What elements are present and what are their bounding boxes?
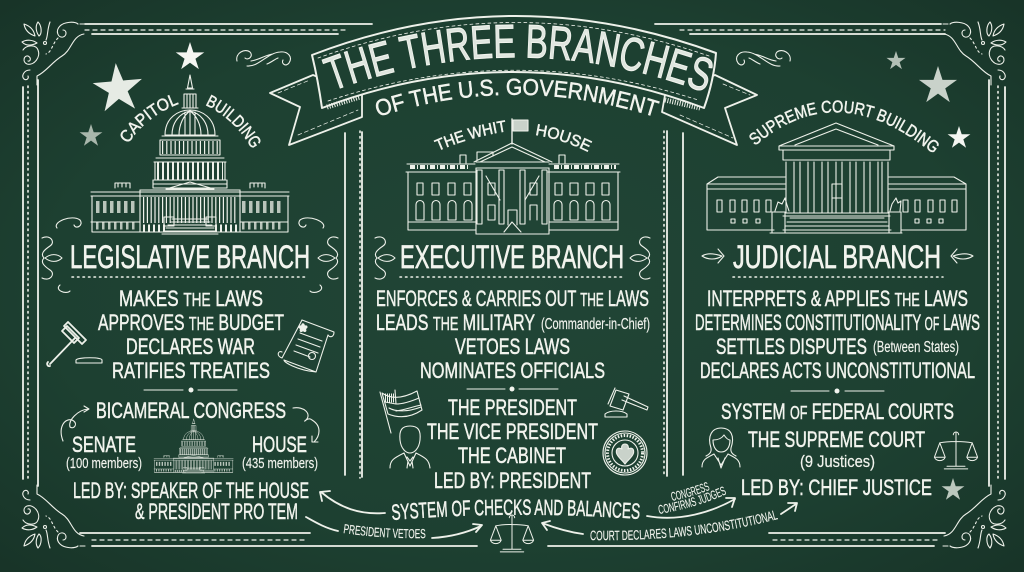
text block: led by: LED BY: SPEAKER OF THE HOUSE <box>73 478 309 503</box>
icon: gavel <box>47 322 102 366</box>
arrow: to legislative <box>320 491 385 513</box>
top swirls <box>237 51 790 66</box>
text block: bicameral congress <box>66 398 318 472</box>
text block: powers: (Commander-in-Chief) <box>541 316 650 333</box>
capitol building label: CAPITOL <box>120 94 179 142</box>
icon: supreme court <box>707 123 966 233</box>
arrow: congress confirms judges: CONGRESS <box>671 482 710 501</box>
icon: presidential seal <box>603 431 647 475</box>
icon: scroll <box>278 320 334 372</box>
text block: powers: (Between States) <box>873 339 959 356</box>
icon: scales of justice <box>934 432 978 469</box>
stars <box>80 42 204 146</box>
text block: powers: SETTLES DISPUTES <box>716 334 867 359</box>
capitol building label: BUILDING <box>206 94 260 148</box>
icon: small capitol <box>154 419 233 473</box>
text block: led by: & PRESIDENT PRO TEM <box>135 499 298 524</box>
arrows: senate and house <box>61 406 319 442</box>
text block: courts <box>721 399 954 500</box>
text block: courts: THE SUPREME COURT <box>748 427 925 452</box>
panel: executive branch <box>374 118 650 493</box>
text block: officers: THE VICE PRESIDENT <box>427 419 598 444</box>
icon: president <box>390 426 430 468</box>
text block: bicameral congress: SENATE <box>72 432 136 457</box>
text block: powers: VETOES LAWS <box>455 334 570 359</box>
arrow: president vetoes <box>305 516 483 539</box>
icon: american flag <box>380 390 422 433</box>
text block: officers: THE CABINET <box>458 443 566 468</box>
white house label: HOUSE <box>536 124 592 152</box>
heading: judicial branch: JUDICIAL BRANCH <box>733 239 941 275</box>
star <box>942 478 964 500</box>
text block: led by <box>73 478 309 524</box>
text block: bicameral congress: BICAMERAL CONGRESS <box>96 398 286 423</box>
ribbon body <box>312 16 716 108</box>
title ribbon banner <box>269 15 758 146</box>
text block: officers: THE PRESIDENT <box>448 395 577 420</box>
white house label <box>434 120 592 152</box>
text block: powers: LEADS THE MILITARY <box>376 310 535 335</box>
heading: executive branch <box>375 237 650 279</box>
icon: executive gavel <box>605 388 648 417</box>
text block: powers <box>695 286 980 383</box>
capitol building label <box>120 94 260 148</box>
stars <box>886 51 970 148</box>
text block: powers: RATIFIES TREATIES <box>112 358 270 383</box>
arrow: court declares laws unconstitutional: COURT DECLARES LAWS UNCONSTITUTIONAL <box>590 510 778 540</box>
arrow: president vetoes: PRESIDENT VETOES <box>344 524 426 538</box>
panel: legislative branch <box>42 42 338 524</box>
heading: legislative branch <box>42 218 338 292</box>
text block: powers <box>98 286 284 383</box>
text block: officers <box>427 395 598 493</box>
text block: powers: NOMINATES OFFICIALS <box>420 358 605 383</box>
text block: bicameral congress: (435 members) <box>242 455 318 472</box>
checks and balances <box>305 482 798 552</box>
supreme court building label: SUPREME COURT BUILDING <box>749 100 939 152</box>
text block: officers: LED BY: PRESIDENT <box>434 468 591 493</box>
panel: judicial branch <box>695 51 980 500</box>
text block: powers: APPROVES THE BUDGET <box>98 310 284 335</box>
icon: center scales <box>490 515 534 552</box>
text block: powers: DECLARES WAR <box>126 334 255 359</box>
icon: justice <box>702 428 740 468</box>
icon: capitol building <box>91 75 289 234</box>
white house label: THE WHIT <box>434 120 506 150</box>
text block: courts: LED BY: CHIEF JUSTICE <box>741 475 932 500</box>
subtitle text: OF THE U.S. GOVERNMENT <box>376 78 660 116</box>
text block: bicameral congress: (100 members) <box>66 455 142 472</box>
heading: executive branch: EXECUTIVE BRANCH <box>400 239 624 275</box>
heading: system of checks and balances: SYSTEM OF CHECKS AND BALANCES <box>392 499 640 520</box>
text block: courts: (9 Justices) <box>800 452 875 471</box>
text block: powers: INTERPRETS & APPLIES THE LAWS <box>707 286 968 311</box>
text block: powers: MAKES THE LAWS <box>119 286 263 311</box>
title text: THE THREE BRANCHES <box>322 24 713 90</box>
ribbon tails <box>270 75 757 145</box>
arrow: court to center <box>542 521 583 534</box>
arrow: congress confirms judges: CONFIRMS JUDGES <box>658 486 726 514</box>
text block: bicameral congress: HOUSE <box>252 432 307 457</box>
text block: courts: SYSTEM OF FEDERAL COURTS <box>721 399 954 424</box>
text block: powers: ENFORCES & CARRIES OUT THE LAWS <box>376 286 649 311</box>
icon: white house <box>406 119 620 234</box>
heading: legislative branch: LEGISLATIVE BRANCH <box>70 239 310 275</box>
text block: powers <box>376 286 650 383</box>
